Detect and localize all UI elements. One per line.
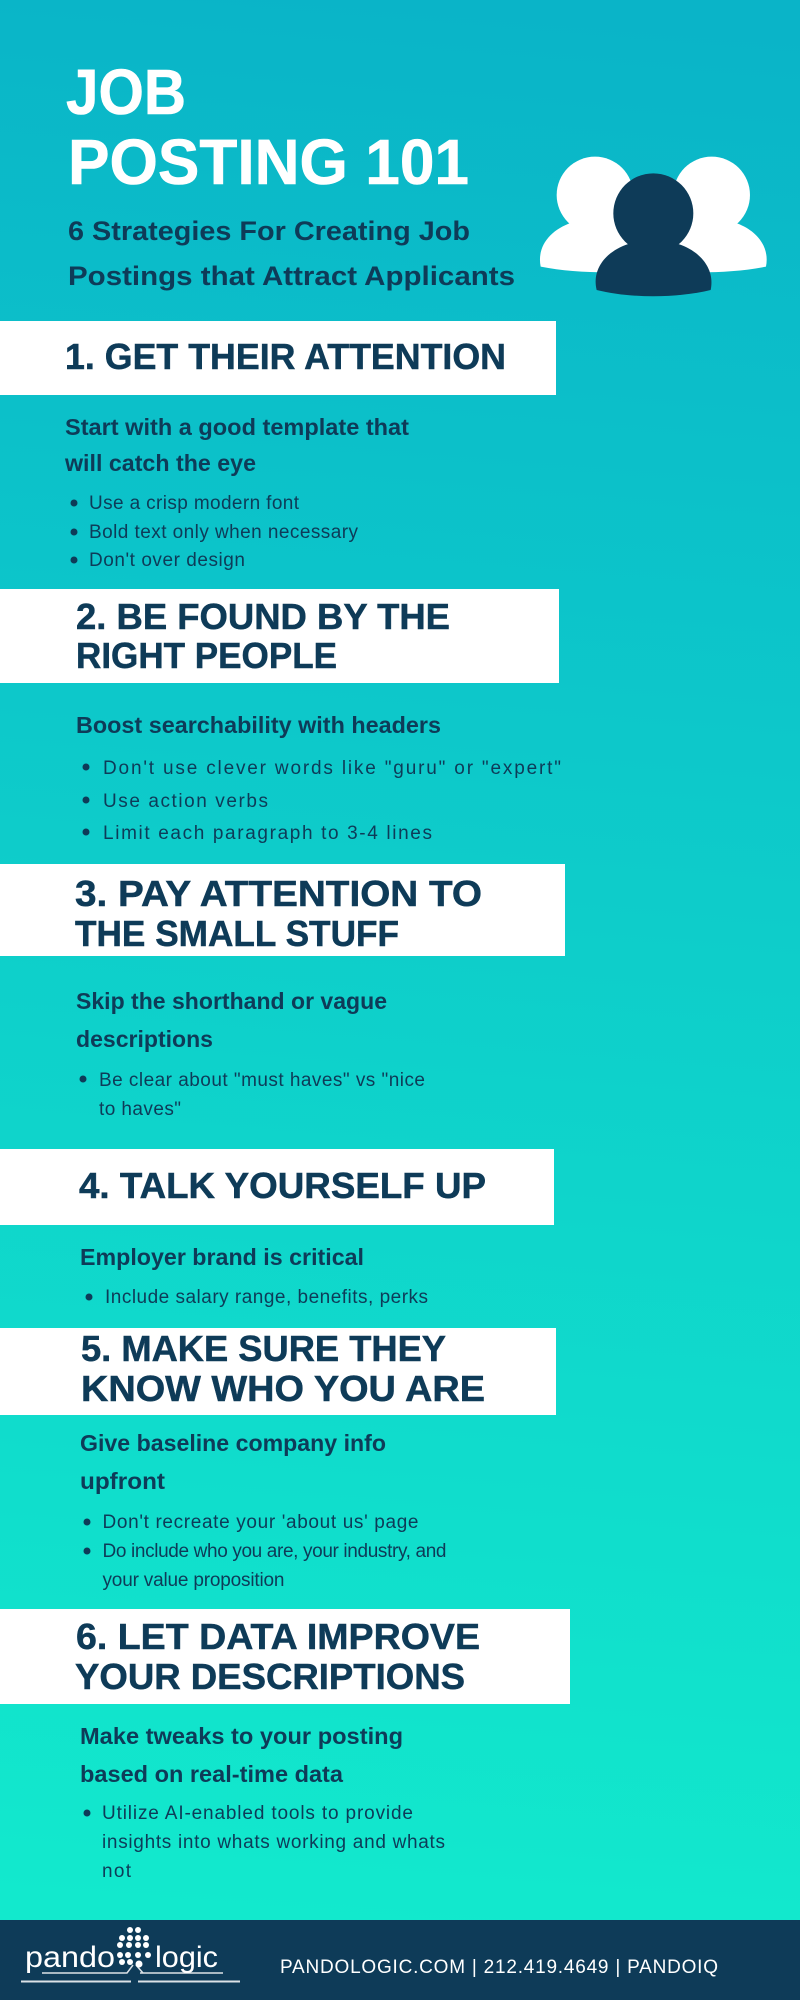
bullet list 2: Limit each paragraph to 3-4 lines — [103, 823, 432, 844]
heading bar 6 — [0, 1609, 570, 1704]
lead text 1: Start with a good template that — [65, 414, 409, 440]
logo: pandologic: logic — [155, 1941, 218, 1974]
subtitle: Postings that Attract Applicants — [68, 261, 515, 291]
lead text 5 — [80, 1430, 386, 1494]
panel: section 2 — [0, 589, 561, 844]
lead text 4: Employer brand is critical — [80, 1244, 364, 1270]
heading 5 — [81, 1328, 485, 1409]
header panel — [66, 56, 767, 296]
bullet list 5: your value proposition — [102, 1570, 284, 1591]
bullet list 6: insights into whats working and whats — [102, 1832, 445, 1853]
heading 2 — [76, 596, 450, 676]
panel: section 3 — [0, 864, 565, 1120]
heading 2: RIGHT PEOPLE — [76, 635, 337, 676]
lead text 2: Boost searchability with headers — [76, 712, 441, 738]
heading 5: KNOW WHO YOU ARE — [81, 1368, 485, 1409]
lead text 5: Give baseline company info — [80, 1430, 386, 1456]
heading 6: YOUR DESCRIPTIONS — [75, 1656, 465, 1697]
lead text 3: Skip the shorthand or vague — [76, 988, 387, 1014]
heading bar 3 — [0, 864, 565, 956]
panel: section 4 — [0, 1149, 554, 1308]
subtitle: 6 Strategies For Creating Job — [68, 216, 470, 246]
panel: section 6 — [0, 1609, 570, 1882]
bullet list 6 — [84, 1803, 445, 1882]
panel: section 5 — [0, 1328, 556, 1591]
contact details: PANDOLOGIC.COM | 212.419.4649 | PANDOIQ — [280, 1957, 718, 1978]
lead text 6: Make tweaks to your posting — [80, 1723, 403, 1749]
panel: section 1 — [0, 321, 556, 571]
title: POSTING 101 — [68, 126, 469, 198]
bullet list 5: Don't recreate your 'about us' page — [102, 1512, 418, 1533]
lead text 6 — [80, 1723, 403, 1787]
heading bar 1 — [0, 321, 556, 395]
bullet list 1: Use a crisp modern font — [89, 493, 300, 514]
subtitle — [68, 216, 515, 291]
bullet list 3 — [80, 1070, 425, 1120]
lead text 1 — [64, 414, 409, 476]
heading bar 2 — [0, 589, 559, 683]
footer background — [0, 1920, 800, 2000]
bullet list 1 — [70, 493, 358, 571]
heading 4: 4. TALK YOURSELF UP — [79, 1165, 486, 1206]
bullet list 3: to haves" — [99, 1099, 181, 1120]
bullet list 5: Do include who you are, your industry, and — [102, 1541, 446, 1562]
heading 3: THE SMALL STUFF — [75, 913, 399, 954]
title: JOB — [66, 56, 186, 128]
lead text 6: based on real-time data — [80, 1761, 344, 1787]
icon: group of three people — [540, 157, 767, 296]
heading 6 — [75, 1616, 480, 1697]
bullet list 4: Include salary range, benefits, perks — [105, 1287, 428, 1308]
heading 3 — [75, 873, 482, 954]
lead text 1: will catch the eye — [64, 450, 256, 476]
heading bar 4 — [0, 1149, 554, 1225]
footer panel — [0, 1920, 800, 2000]
heading 5: 5. MAKE SURE THEY — [81, 1328, 446, 1369]
title — [66, 56, 469, 198]
heading 6: 6. LET DATA IMPROVE — [76, 1616, 480, 1657]
lead text 3 — [76, 988, 387, 1052]
bullet list 6: not — [102, 1861, 132, 1882]
lead text 5: upfront — [80, 1468, 165, 1494]
lead text 3: descriptions — [76, 1026, 213, 1052]
bullet list 3: Be clear about "must haves" vs "nice — [99, 1070, 425, 1091]
heading 1: 1. GET THEIR ATTENTION — [65, 336, 506, 377]
bullet list 2 — [82, 758, 561, 844]
logo: pandologic: pando — [25, 1941, 115, 1974]
bullet list 2: Don't use clever words like "guru" or "expert" — [103, 758, 561, 779]
heading bar 5 — [0, 1328, 556, 1415]
heading 3: 3. PAY ATTENTION TO — [75, 873, 482, 914]
logo: pandologic — [21, 1927, 240, 1982]
heading 2: 2. BE FOUND BY THE — [76, 596, 450, 637]
bullet list 1: Bold text only when necessary — [89, 522, 358, 543]
bullet list 5 — [84, 1512, 446, 1591]
bullet list 6: Utilize AI-enabled tools to provide — [102, 1803, 413, 1824]
bullet list 1: Don't over design — [89, 550, 245, 571]
bullet list 2: Use action verbs — [103, 791, 268, 812]
